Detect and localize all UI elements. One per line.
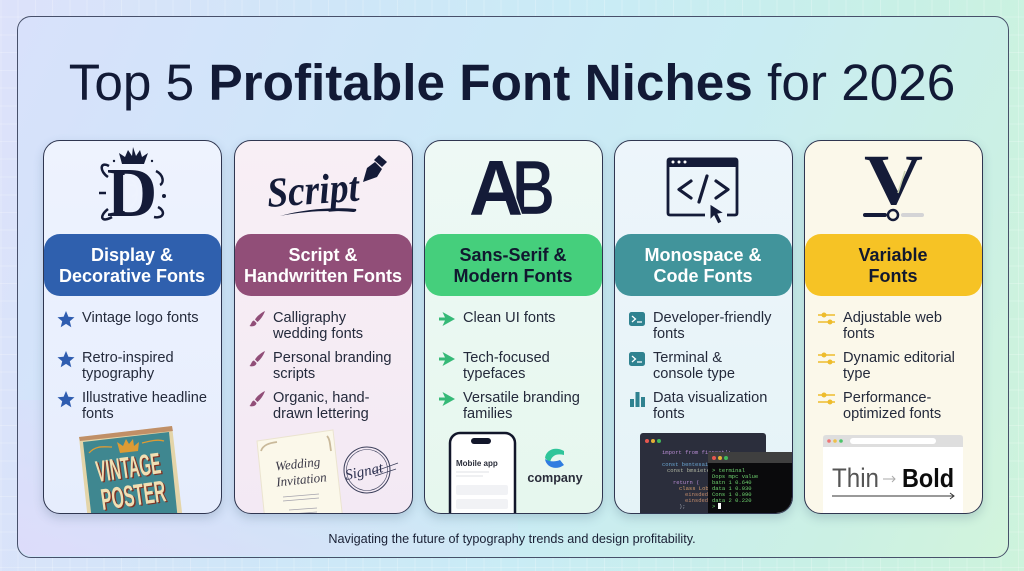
bullet: performance-optimized fonts (843, 390, 941, 422)
bullet: tech-focused typefaces (463, 350, 550, 382)
wedding invitation and signature stamp: Invitation (274, 469, 327, 490)
phone mockup and company logo: company (527, 471, 582, 485)
bullet: adjustable web fonts: fonts (843, 326, 875, 342)
icon: AB letters: A (468, 144, 522, 232)
panel: script and handwritten fonts (234, 140, 412, 514)
header: monospace and code: Code Fonts (654, 266, 752, 286)
icon: ornate D with crown (99, 147, 166, 232)
icon: star (58, 391, 74, 408)
icon: sliders (818, 312, 835, 324)
browser mockup: thin to bold (823, 435, 963, 513)
bullet: dynamic editorial type: type (843, 366, 871, 382)
code editor and terminal windows: batn 1 0.640 (712, 479, 751, 486)
bullet: data visualization fonts (653, 390, 767, 422)
bullet: personal branding scripts (273, 350, 391, 382)
header: sans-serif and modern: Modern Fonts (454, 266, 572, 286)
header: script and handwritten: Script & (288, 244, 358, 264)
icon: code browser window with cursor (666, 158, 738, 224)
code editor and terminal windows (640, 433, 792, 513)
browser mockup: thin to bold: Thin (832, 463, 878, 493)
bullet: retro-inspired typography: typography (82, 366, 154, 382)
bullet: adjustable web fonts (843, 310, 942, 342)
code editor and terminal windows: einsdedevtictio (684, 497, 734, 504)
icon: star (58, 311, 74, 328)
icon: sliders (818, 392, 835, 404)
icon: green arrow (439, 392, 455, 406)
bullet: organic hand-drawn lettering (273, 390, 370, 422)
header: monospace and code (614, 234, 792, 296)
icon: AB letters: B (512, 144, 554, 232)
bullet: data visualization fonts: fonts (653, 406, 685, 422)
code editor and terminal windows: > (712, 503, 715, 510)
title: Top 5 Profitable Font Niches for 2026 (69, 54, 955, 111)
code editor and terminal windows: const bentesaine = re (662, 461, 731, 468)
code editor and terminal windows: Cons 1 0.090 (712, 491, 751, 498)
bullet: performance-optimized fonts: optimized fonts (843, 406, 941, 422)
panel: monospace and code fonts (614, 140, 792, 514)
header: script and handwritten (234, 234, 412, 296)
icon: paintbrush (250, 391, 265, 406)
panel: display and decorative fonts (42, 140, 222, 514)
panel: sans-serif and modern fonts (424, 140, 602, 514)
bullet: illustrative headline fonts: fonts (82, 406, 114, 422)
header: sans-serif and modern (424, 234, 602, 296)
icon: paintbrush (250, 351, 265, 366)
bullet: personal branding scripts: Personal branding (273, 350, 391, 366)
bullet: developer-friendly fonts: Developer-friendly (653, 310, 771, 326)
bullet: tech-focused typefaces: Tech-focused (463, 350, 550, 366)
phone mockup and company logo: Mobile app (456, 459, 497, 468)
icon: terminal prompt (629, 352, 645, 366)
icon: V with weight slider: V (864, 141, 922, 220)
bullet: dynamic editorial type (843, 350, 955, 382)
header: variable fonts (804, 234, 982, 296)
bullet: developer-friendly fonts (653, 310, 772, 342)
code editor and terminal windows: > terminal (712, 467, 745, 474)
panel lavender tint (18, 400, 518, 556)
icon: sliders (818, 352, 835, 364)
bullet: calligraphy wedding fonts: Calligraphy (273, 310, 346, 326)
wedding invitation and signature stamp (256, 430, 398, 513)
bullet: personal branding scripts: scripts (273, 366, 315, 382)
header: variable fonts: Fonts (868, 266, 918, 286)
bullet: dynamic editorial type: Dynamic editorial (843, 350, 955, 366)
browser mockup: thin to bold: Bold (902, 463, 954, 493)
header: variable fonts: Variable (858, 244, 928, 264)
header: sans-serif and modern: Sans-Serif & (459, 244, 567, 264)
icon: ornate D with crown: D (106, 155, 157, 232)
icon: terminal prompt (629, 312, 645, 326)
header: monospace and code: Monospace & (644, 244, 762, 264)
header: script and handwritten: Handwritten Fonts (244, 266, 402, 286)
bullet: performance-optimized fonts: Performance- (843, 390, 931, 406)
icon: bar chart (630, 392, 645, 407)
bullet: retro-inspired typography: Retro-inspired (82, 350, 174, 366)
bullet: versatile branding families: families (463, 406, 512, 422)
panel: variable fonts (804, 140, 982, 514)
icon: green arrow (439, 352, 455, 366)
icon: AB letters (468, 144, 554, 232)
bullet: tech-focused typefaces: typefaces (463, 366, 525, 382)
bullet: clean ui fonts: Clean UI fonts (463, 310, 555, 326)
header: display and decorative: Display & (91, 244, 173, 264)
bullet: illustrative headline fonts: Illustrative headline (82, 390, 207, 406)
icon: star (58, 351, 74, 368)
bullet: retro-inspired typography (82, 350, 174, 382)
bullet: calligraphy wedding fonts: wedding fonts (273, 326, 363, 342)
header: display and decorative (44, 234, 220, 296)
bullet: vintage logo fonts: Vintage logo fonts (82, 310, 199, 326)
vintage poster image (79, 426, 182, 513)
bullet: terminal and console type: Terminal & (653, 350, 722, 366)
code editor and terminal windows: Dops mpc value (712, 473, 758, 480)
bullet: data visualization fonts: Data visualization (653, 390, 767, 406)
bullet: calligraphy wedding fonts (273, 310, 363, 342)
bullet: versatile branding families (463, 390, 580, 422)
bullet: illustrative headline fonts (82, 390, 207, 422)
code editor and terminal windows: ); (678, 503, 685, 510)
code editor and terminal windows: einsdedeviltad (684, 491, 731, 498)
icon: paintbrush (250, 311, 265, 326)
bullet: adjustable web fonts: Adjustable web (843, 310, 942, 326)
code editor and terminal windows: import from fixrest'; (662, 449, 731, 456)
phone mockup and company logo (448, 432, 582, 513)
code editor and terminal windows: data 2 0.220 (712, 497, 751, 504)
bullet: organic hand-drawn lettering: drawn lettering (273, 406, 369, 422)
code editor and terminal windows: class LobiereraPr (678, 485, 735, 492)
footer tagline: Navigating the future of typography trends and design profitability. (328, 532, 696, 546)
wedding invitation and signature stamp: Wedding (274, 454, 321, 473)
icon: script word with pen nib: Script (265, 165, 361, 217)
header: display and decorative: Decorative Fonts (59, 266, 205, 286)
wedding invitation and signature stamp: Signat (343, 460, 385, 484)
code editor and terminal windows: return ( (672, 479, 699, 486)
code editor and terminal windows: const bmsieteex = [ (666, 467, 729, 474)
code editor and terminal windows: data 1 0.030 (712, 485, 751, 492)
icon: green arrow (439, 312, 455, 326)
bullet: organic hand-drawn lettering: Organic, hand- (273, 390, 370, 406)
bullet: terminal and console type (653, 350, 735, 382)
bullet: developer-friendly fonts: fonts (653, 326, 685, 342)
bullet: terminal and console type: console type (653, 366, 735, 382)
bullet: versatile branding families: Versatile branding (463, 390, 580, 406)
